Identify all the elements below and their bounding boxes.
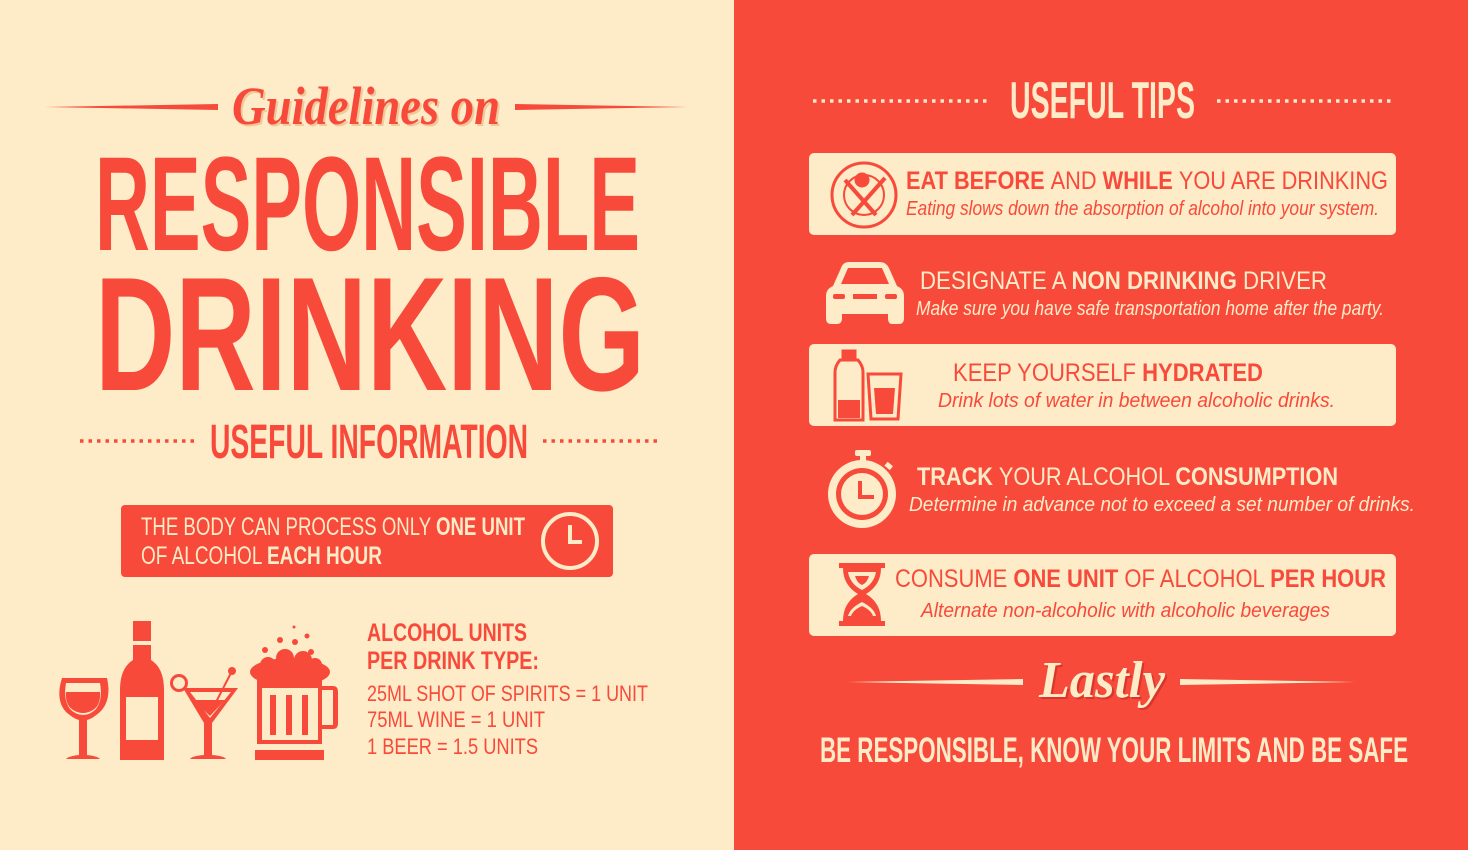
cocktail — [183, 688, 238, 759]
heading: useful information: USEFUL INFORMATION — [210, 416, 528, 469]
tip 4: track consumption: TRACK YOUR ALCOHOL CONSUMPTION — [917, 463, 1338, 491]
heading: lastly: Lastly — [1038, 652, 1166, 709]
tip 3: hydrated — [809, 344, 1396, 426]
right panel background — [734, 0, 1468, 850]
title: responsible drinking: DRINKING — [95, 244, 645, 425]
tip 5: one unit per hour: CONSUME ONE UNIT OF ALCOHOL PER HOUR — [895, 565, 1386, 593]
tip 3: hydrated: Drink lots of water in between alcoholic drinks. — [938, 390, 1335, 412]
heading: useful tips: USEFUL TIPS — [1010, 72, 1195, 130]
bottle — [120, 621, 164, 760]
tip 5: one unit per hour: Alternate non-alcoholic with alcoholic beverages — [920, 600, 1330, 622]
text: alcohol units per drink type: 25ML SHOT OF SPIRITS = 1 UNIT — [367, 681, 648, 706]
tip 2: designate driver — [826, 262, 1384, 324]
tip 4: track consumption — [828, 450, 1415, 528]
icon: hourglass — [839, 563, 885, 626]
heading: lastly: Lastly — [1040, 654, 1168, 711]
icon: car — [826, 262, 904, 324]
left panel background — [0, 0, 734, 850]
text: alcohol units per drink type: PER DRINK TYPE: — [367, 647, 539, 675]
text: alcohol units per drink type: 1 BEER = 1.5 UNITS — [367, 734, 538, 759]
heading: lastly — [848, 652, 1355, 711]
callout: one unit per hour: OF ALCOHOL EACH HOUR — [141, 542, 382, 570]
tip 1: eat: EAT BEFORE AND WHILE YOU ARE DRINKING — [906, 167, 1388, 195]
header: guidelines on — [45, 76, 688, 138]
title: responsible drinking — [95, 130, 645, 425]
tip 2: designate driver: Make sure you have safe transportation home after the party. — [916, 298, 1384, 320]
callout: one unit per hour — [121, 505, 613, 577]
icons: drinks — [59, 621, 338, 760]
tip 1: eat: Eating slows down the absorption of alcohol into your system. — [906, 198, 1379, 220]
beer mug — [257, 680, 338, 744]
text: alcohol units per drink type — [367, 619, 648, 759]
callout: one unit per hour: THE BODY CAN PROCESS ONLY ONE UNIT — [141, 513, 525, 541]
title: responsible drinking: RESPONSIBLE — [95, 130, 640, 279]
text: alcohol units per drink type: ALCOHOL UNITS — [367, 619, 527, 647]
tip 3: hydrated: KEEP YOURSELF HYDRATED — [953, 359, 1263, 387]
tip 2: designate driver: DESIGNATE A NON DRINKING DRIVER — [920, 267, 1327, 295]
tip 4: track consumption: Determine in advance not to exceed a set number of drinks. — [909, 494, 1415, 516]
text: alcohol units per drink type: 75ML WINE = 1 UNIT — [367, 707, 545, 732]
tip 1: eat — [809, 153, 1396, 235]
icon: no food — [832, 163, 896, 227]
icon: water bottle and glass — [835, 351, 901, 420]
tip 5: one unit per hour — [809, 554, 1396, 636]
icon: clock — [543, 514, 597, 568]
icon: stopwatch — [828, 450, 896, 528]
header: guidelines on: Guidelines on — [232, 76, 500, 136]
header: guidelines on: Guidelines on — [234, 78, 502, 138]
wine glass — [59, 678, 108, 759]
